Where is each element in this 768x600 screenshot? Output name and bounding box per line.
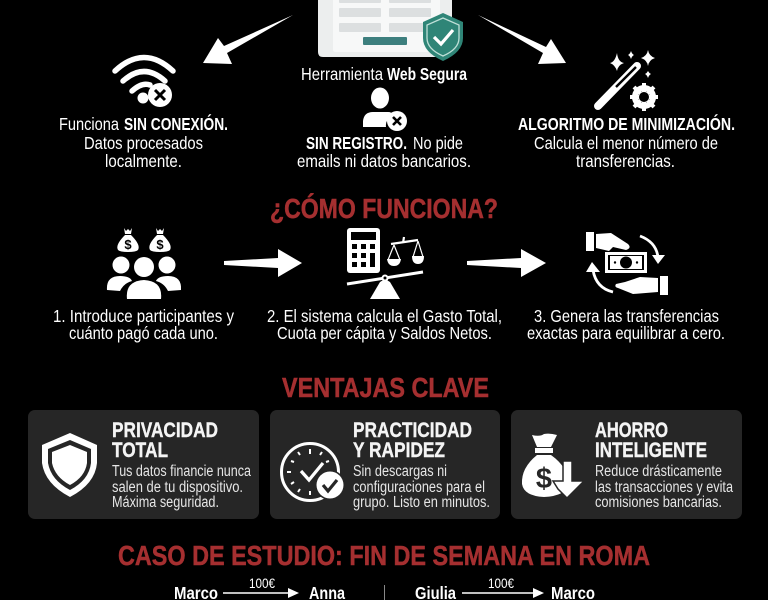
text: algorithm feature: Calcula el menor número de [534, 133, 718, 153]
text: step 2: Cuota per cápita y Saldos Netos. [277, 323, 492, 343]
arrow: right diagonal [478, 15, 566, 64]
arrow: left diagonal [203, 15, 293, 64]
text: offline feature: Funciona [59, 114, 119, 134]
text: privacy body: Tus datos financie nunca [112, 463, 251, 480]
text: offline feature: localmente. [105, 151, 182, 171]
text: privacy body: Máxima seguridad. [112, 494, 219, 511]
icon: secure web form document [318, 0, 463, 61]
text: practicality title: PRACTICIDAD [353, 419, 472, 442]
text: practicality title [353, 419, 472, 462]
text: step 3: 3. Genera las transferencias [534, 306, 719, 326]
text: no registration feature [297, 133, 471, 171]
icon: shield [42, 433, 97, 497]
panel: practicality and speed [270, 410, 500, 519]
transfer: Marco to Anna: 100€ [249, 575, 275, 591]
text: savings title: INTELIGENTE [595, 439, 707, 462]
text: privacy title: TOTAL [112, 439, 168, 462]
text: offline feature: SIN CONEXIÓN. [124, 113, 228, 134]
text: no registration feature: SIN REGISTRO. [306, 133, 407, 153]
icon: participants with money bags: $ [124, 237, 132, 252]
text: step 2 [267, 306, 502, 343]
transfer: Giulia to Marco: 100€ [488, 575, 514, 591]
text: savings body: las transacciones y evita [595, 479, 733, 496]
text: step 2: 2. El sistema calcula el Gasto Total, [267, 306, 502, 326]
icon: clock with check [282, 444, 345, 500]
text: privacy body: salen de tu dispositivo. [112, 479, 243, 496]
text: algorithm feature: transferencias. [576, 151, 675, 171]
text: practicality body: Sin descargas ni [353, 463, 447, 480]
text: offline feature [59, 113, 228, 171]
text: tool caption [301, 64, 467, 84]
icon: user without registration [363, 88, 407, 131]
text: step 1: cuánto pagó cada uno. [69, 323, 218, 343]
text: algorithm feature [518, 113, 735, 171]
text: privacy title: PRIVACIDAD [112, 419, 218, 442]
icon: participants with money bags: $ [156, 237, 164, 252]
text: step 3 [527, 306, 725, 343]
text: step 1 [53, 306, 234, 343]
text: privacy body [112, 463, 251, 511]
icon: calculator and scales [347, 228, 424, 299]
text: step 3: exactas para equilibrar a cero. [527, 323, 725, 343]
heading: key advantages: VENTAJAS CLAVE [282, 372, 489, 403]
panel: total privacy [28, 410, 259, 519]
text: practicality body [353, 463, 490, 511]
heading: how it works: ¿CÓMO FUNCIONA? [270, 193, 498, 224]
text: savings body: comisiones bancarias. [595, 494, 722, 511]
arrow: step 1 to step 2 [224, 249, 302, 277]
text: offline feature: Datos procesados [84, 133, 203, 153]
text: tool caption: Web Segura [387, 64, 467, 84]
text: savings body: Reduce drásticamente [595, 463, 722, 480]
text: tool caption: Herramienta [301, 64, 383, 84]
text: practicality body: configuraciones para el [353, 479, 485, 496]
text: step 1: 1. Introduce participantes y [53, 306, 234, 326]
transfer: Marco to Anna [174, 575, 345, 600]
transfer: Giulia to Marco [415, 575, 595, 600]
heading: case study: CASO DE ESTUDIO: FIN DE SEMANA EN ROMA [118, 540, 650, 571]
icon: money bag with down arrow: $ [536, 463, 552, 495]
text: no registration feature: emails ni datos bancarios. [297, 151, 471, 171]
icon: money transfer between hands [586, 232, 668, 295]
text: practicality body: grupo. Listo en minutos. [353, 494, 490, 511]
text: privacy title [112, 419, 218, 462]
icon: money bag with down arrow [522, 434, 584, 498]
icon: magic wand and gear [598, 50, 658, 111]
icon: participants with money bags [107, 228, 181, 299]
text: practicality title: Y RAPIDEZ [353, 439, 445, 462]
text: savings title: AHORRO [595, 419, 668, 442]
icon: wifi off [115, 58, 173, 107]
panel: smart savings [511, 410, 742, 519]
text: savings body [595, 463, 733, 511]
text: no registration feature: No pide [413, 133, 463, 153]
text: savings title [595, 419, 707, 462]
arrow: step 2 to step 3 [467, 249, 546, 277]
